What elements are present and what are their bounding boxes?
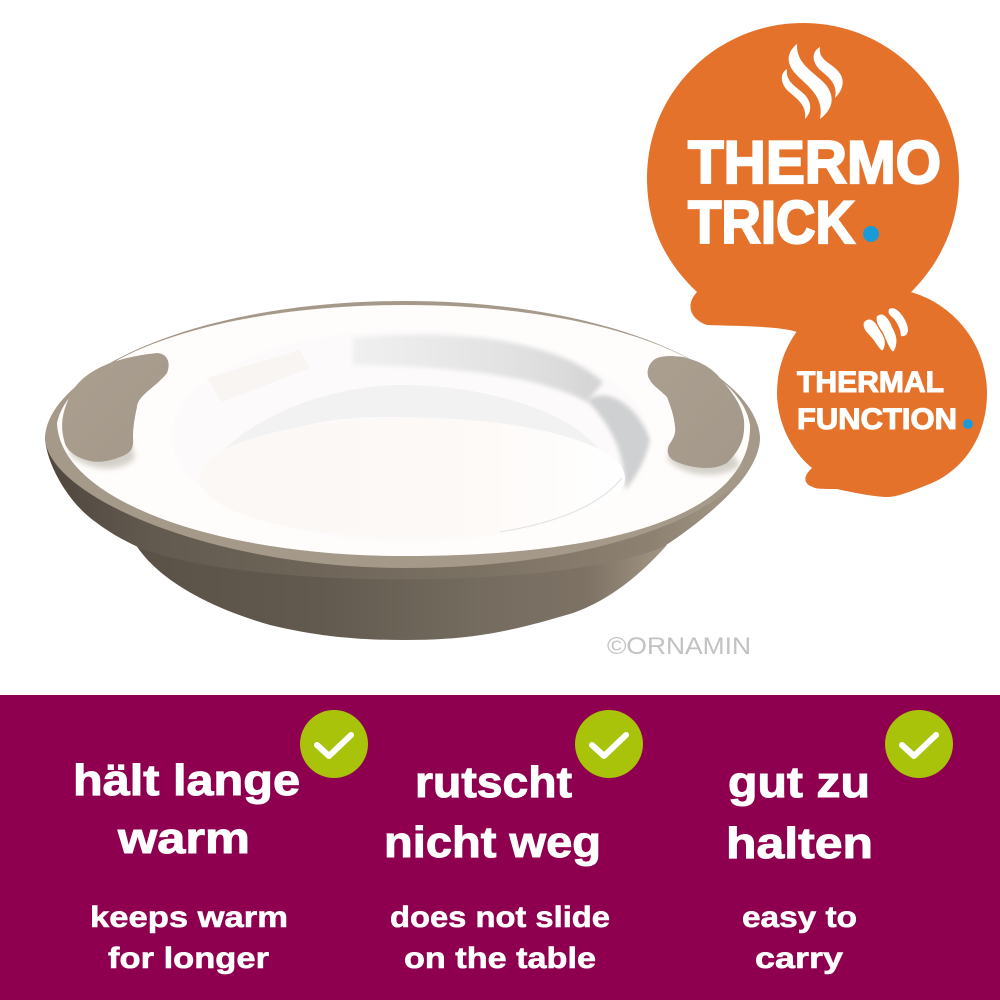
english text: on the table <box>404 942 596 975</box>
benefit: easy to carry <box>726 710 953 975</box>
badge: thermo trick <box>647 23 959 332</box>
german text <box>384 758 601 867</box>
badge: thermal function <box>777 288 987 497</box>
german text: nicht weg <box>384 818 601 867</box>
heading: trick: TRICK <box>688 189 855 256</box>
left handle <box>62 353 169 462</box>
icon: steam <box>865 309 907 350</box>
well floor <box>199 418 625 538</box>
german text: gut zu <box>728 758 870 807</box>
heading: function: FUNCTION <box>797 403 957 436</box>
plate well <box>172 330 648 542</box>
benefit: keeps warm <box>73 710 368 975</box>
english text: for longer <box>108 942 269 975</box>
icon: check <box>300 710 368 778</box>
white plate surface <box>57 305 750 556</box>
heading: thermal: THERMAL <box>797 366 944 399</box>
german text <box>726 758 873 868</box>
badge shape <box>777 288 987 497</box>
benefit: does not slide <box>384 710 643 975</box>
english text <box>742 901 857 975</box>
badge shape <box>647 23 959 332</box>
icon: check <box>885 710 953 778</box>
plate illustration <box>45 301 760 640</box>
english text <box>90 901 288 975</box>
well gray shading <box>200 335 650 490</box>
panel: benefits band <box>0 695 1000 1000</box>
german text: hält lange <box>73 756 300 805</box>
english text: does not slide <box>390 901 610 934</box>
english text: easy to <box>742 901 857 934</box>
blue dot <box>963 419 973 429</box>
heading: thermo: THERMO <box>688 129 941 196</box>
english text <box>390 901 610 975</box>
icon: steam <box>782 44 843 119</box>
german text: rutscht <box>415 758 572 807</box>
right handle <box>648 356 744 468</box>
plate body <box>136 545 667 640</box>
english text: carry <box>755 942 843 975</box>
english text: keeps warm <box>90 901 288 934</box>
copyright: ©ORNAMIN <box>607 633 751 660</box>
blue dot <box>863 226 879 242</box>
german text <box>73 756 300 863</box>
handle shadows <box>70 440 740 475</box>
icon: check <box>575 710 643 778</box>
german text: halten <box>726 819 873 868</box>
german text: warm <box>117 814 250 863</box>
rim underside <box>45 437 760 579</box>
rim band <box>45 301 760 568</box>
